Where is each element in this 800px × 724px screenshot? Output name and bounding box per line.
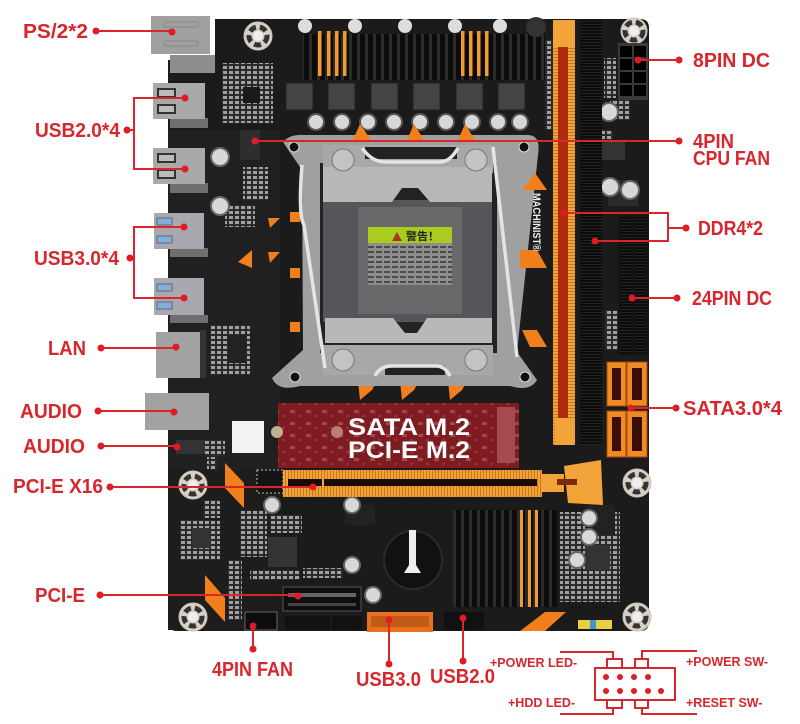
retention plate [272,135,539,388]
reset switch label: +RESET SW- [686,696,762,710]
label: DDR4: DDR4*2 [698,218,763,240]
rear capacitors [211,103,639,603]
PS/2 port [151,16,210,54]
PCI-E x1 slot [283,587,361,611]
power switch label: +POWER SW- [686,655,768,669]
USB 3.0 ports [154,213,204,315]
PCI-E x16 slot [257,460,603,505]
socket cover [358,207,462,314]
label: 4PIN CPU FAN: CPU FAN [693,148,770,170]
label: USB 2.0 [35,94,188,172]
label: PCI-E [35,585,302,607]
8 pin connector [618,43,648,100]
pins [603,674,664,694]
audio port [145,393,209,430]
power LED label: +POWER LED- [490,656,577,670]
top VRM heatsink [298,17,546,80]
right orange markings [353,124,547,347]
label: PCI-E X16: PCI-E X16 [13,476,103,498]
USB 3.0 header [367,612,433,632]
HDD LED label: +HDD LED- [508,696,575,710]
M.2 label: SATA M.2 [348,414,470,441]
label: USB2.0 header: USB2.0 [430,666,495,688]
label: 4PIN FAN: 4PIN FAN [212,659,293,681]
chipset heatsink [453,510,557,607]
M.2 label [348,414,470,464]
motherboard PCB [168,19,649,631]
LAN port [156,330,206,378]
warning text: 警告！ [406,229,439,243]
warning triangle [392,232,402,241]
label: USB2.0 header [430,614,495,688]
label: 4PIN CPU FAN [252,131,770,170]
VRM chokes [286,83,525,110]
label: PS/2 [23,21,176,43]
label: 24PIN DC: 24PIN DC [692,288,772,310]
label: AUDIO 2: AUDIO [23,436,85,458]
label: SATA: SATA3.0*4 [683,398,783,420]
label: AUDIO 2 [23,436,180,458]
top gap [365,147,457,159]
label: USB 2.0: USB2.0*4 [35,120,121,142]
bottom corner plate [323,345,493,375]
top corner plate [323,145,493,173]
label: 4PIN FAN [212,622,293,681]
battery holder [384,530,442,589]
corner screws [332,149,487,371]
label: PCI-E: PCI-E [35,585,85,607]
label: 8PIN DC [634,50,770,72]
warning card [368,243,452,285]
surface mount components [176,40,638,629]
label: PS/2: PS/2*2 [23,21,88,43]
M.2 label: PCI-E M.2 [348,437,470,464]
label: AUDIO 1 [20,401,178,423]
VRM capacitors [308,114,528,130]
socket frame interior [320,163,497,353]
label: 24PIN DC [628,288,772,310]
bottom clamp [325,318,492,343]
mounting holes [289,142,530,382]
CPU socket [272,135,539,388]
front panel headers [245,612,484,630]
brand text: MACHINIST® [530,193,542,251]
header outline [595,668,675,700]
USB 2.0 ports [153,83,205,184]
M.2 slot [232,403,519,468]
SATA connectors [607,362,647,457]
label: 8PIN DC: 8PIN DC [693,50,770,72]
mounting holes [179,18,651,631]
retention levers [300,147,517,376]
DIMM slot orange [553,20,575,445]
SATA connector slots [612,368,642,451]
front panel pin diagram [490,651,768,714]
label: USB3.0 header: USB3.0 [356,669,421,691]
label: LAN [48,338,180,360]
label: DDR4 [560,210,763,244]
label: AUDIO 1: AUDIO [20,401,82,423]
label: 4PIN CPU FAN: 4PIN [693,131,734,153]
DIMM slot black [580,20,602,445]
top clamp [323,167,492,202]
pin brackets [560,651,697,714]
24 pin connector [618,215,649,355]
orange board markings [205,205,566,631]
label: SATA [628,398,783,420]
socket body [323,200,492,322]
bottom gap [385,366,445,375]
label: LAN: LAN [48,338,86,360]
label: USB 3.0: USB3.0*4 [34,248,120,270]
label: USB 3.0 [34,224,188,302]
label: USB3.0 header [356,616,421,691]
label: PCI-E X16 [13,476,316,498]
warning label [368,227,452,243]
